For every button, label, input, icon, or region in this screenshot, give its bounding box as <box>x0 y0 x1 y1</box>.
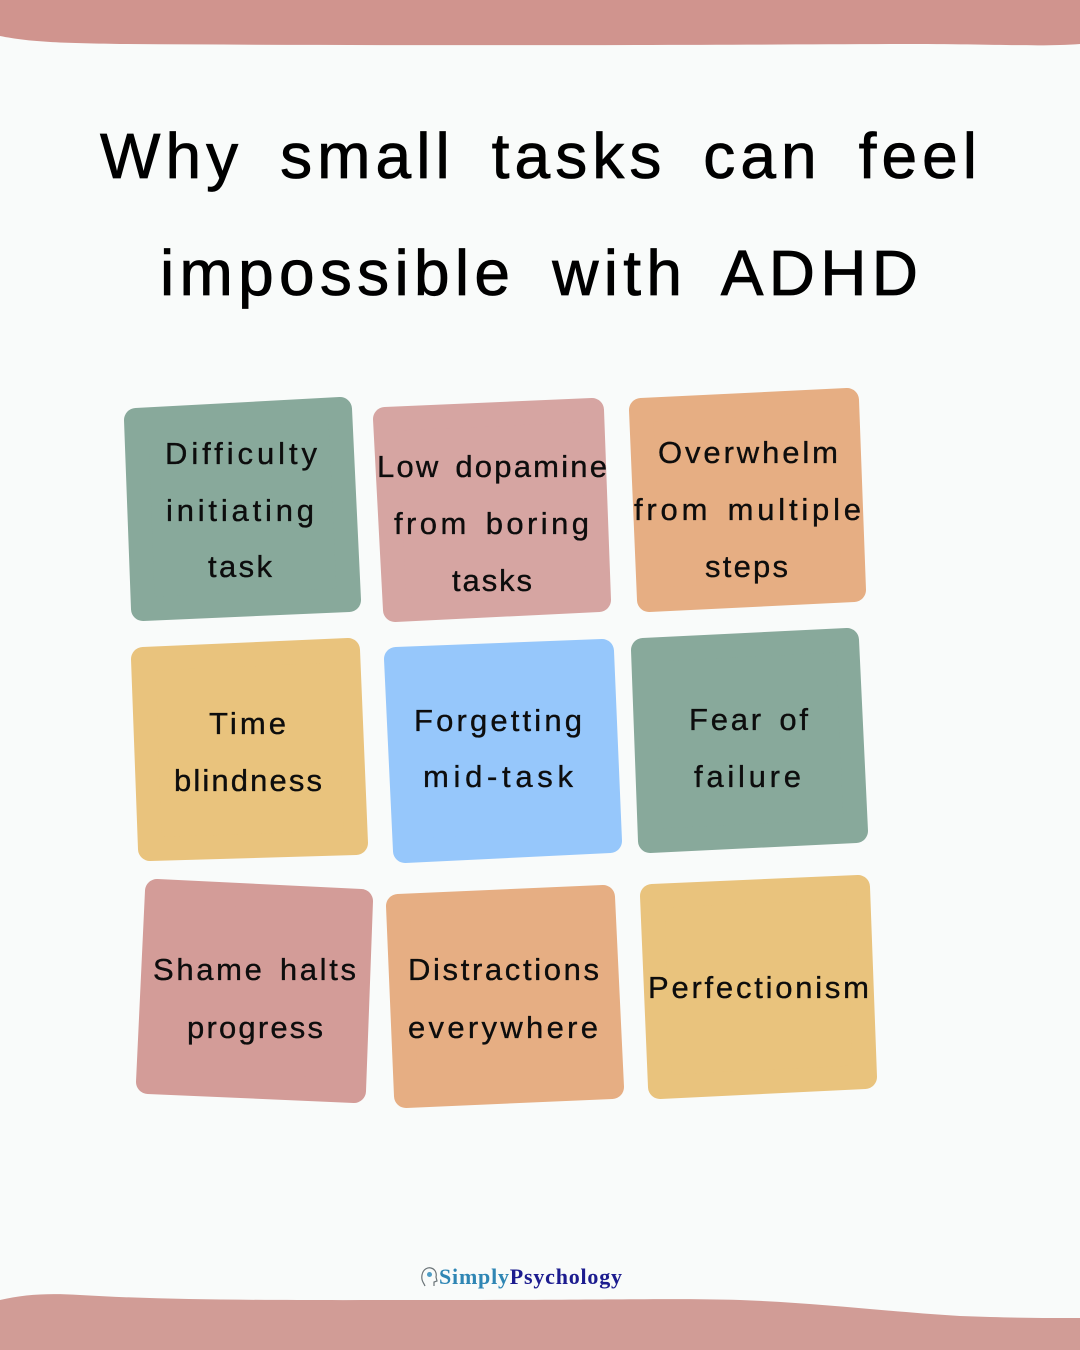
card: fear of failure <box>643 640 856 841</box>
card: difficulty initiating task: initiating <box>166 493 314 528</box>
card: perfectionism: Perfectionism <box>648 970 869 1005</box>
card: low dopamine from boring tasks: from boring <box>394 506 589 541</box>
card: overwhelm from multiple steps: steps <box>705 549 788 584</box>
title: impossible with ADHD <box>160 237 918 309</box>
top banner <box>0 0 1080 45</box>
card: overwhelm from multiple steps: Overwhelm <box>658 435 838 470</box>
card: perfectionism <box>648 887 869 1087</box>
card: shame halts progress: progress <box>187 1010 323 1045</box>
card: distractions everywhere: everywhere <box>408 1010 598 1045</box>
card: time blindness: blindness <box>174 763 322 798</box>
card: forgetting mid-task: mid-task <box>423 759 574 794</box>
logo <box>422 1264 622 1289</box>
title: Why small tasks can feel <box>100 120 977 192</box>
card: fear of failure: failure <box>694 759 801 794</box>
card: fear of failure: Fear of <box>689 702 808 737</box>
card: shame halts progress <box>148 891 361 1091</box>
title <box>100 120 977 309</box>
card: difficulty initiating task: Difficulty <box>165 436 318 471</box>
card: distractions everywhere <box>398 897 612 1096</box>
card: time blindness <box>143 650 356 849</box>
card: time blindness: Time <box>209 706 286 741</box>
bottom banner <box>0 1294 1080 1350</box>
card: forgetting mid-task <box>396 651 610 851</box>
icon: head with brain <box>422 1268 437 1286</box>
card: forgetting mid-task: Forgetting <box>414 703 582 738</box>
card: shame halts progress: Shame halts <box>153 952 356 987</box>
card: low dopamine from boring tasks: Low dopamine <box>377 449 607 484</box>
card: distractions everywhere: Distractions <box>408 952 599 987</box>
card: low dopamine from boring tasks <box>377 410 607 610</box>
card: overwhelm from multiple steps: from multiple <box>634 492 861 527</box>
wordmark: SimplyPsychology <box>439 1264 622 1289</box>
card: difficulty initiating task <box>136 409 349 609</box>
card: overwhelm from multiple steps <box>634 400 861 600</box>
card: difficulty initiating task: task <box>208 549 272 584</box>
card: low dopamine from boring tasks: tasks <box>452 563 532 598</box>
